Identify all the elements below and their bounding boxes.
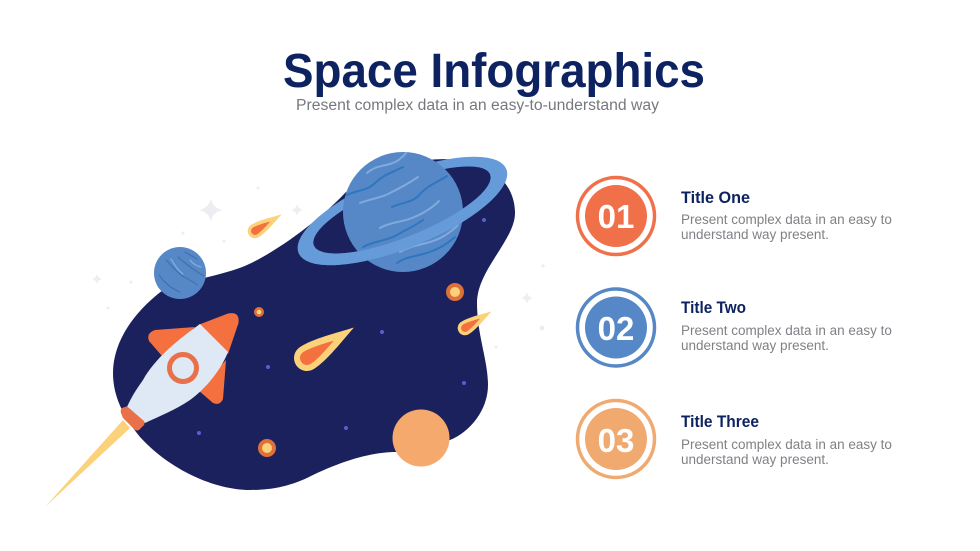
rocket flame [45,420,130,507]
blue star dots [197,218,486,435]
subtitle: Present complex data in an easy-to-understand way [296,97,659,114]
small striped planet [154,247,206,299]
item two heading: Title Two [681,299,746,317]
item three heading: Title Three [681,413,759,431]
orange orb small [254,307,264,317]
item three text: Present complex data in an easy to [681,437,892,452]
planet body [343,152,463,272]
peach planet [392,410,450,466]
planet light stripes [360,153,458,252]
background stars [92,186,546,348]
navy space blob [113,159,515,490]
item two text: understand way present. [681,338,829,353]
item three [578,400,896,478]
space illustration [45,135,546,507]
item two text: Present complex data in an easy to [681,323,892,338]
item one text: Present complex data in an easy to [681,212,892,227]
rocket left fin [148,327,195,356]
badge 01 [578,178,654,254]
planet ring front [298,168,520,287]
title: Space Infographics [283,45,705,98]
rocket top fin [198,313,239,354]
rocket right fin [198,360,226,404]
item two [578,289,896,366]
planet dark stripes [347,167,455,263]
badge 03 [578,400,654,478]
item one [578,178,896,254]
item one text: understand way present. [681,227,829,242]
badge 02: 02 [598,310,634,347]
meteor top left [245,208,285,241]
orange orb right [446,283,464,301]
rocket engine [121,407,144,430]
badge 02 [578,289,654,366]
rocket window [170,354,196,382]
badge 01: 01 [598,198,634,235]
item three text: understand way present. [681,452,829,467]
item one heading: Title One [681,189,750,207]
badge 03: 03 [598,422,634,459]
orange orb bottom [258,439,276,457]
rocket body [127,324,228,423]
meteor large [289,317,361,376]
planet ring back [285,135,520,287]
meteor right [455,305,495,338]
ringed planet [285,135,520,287]
rocket [45,313,239,507]
